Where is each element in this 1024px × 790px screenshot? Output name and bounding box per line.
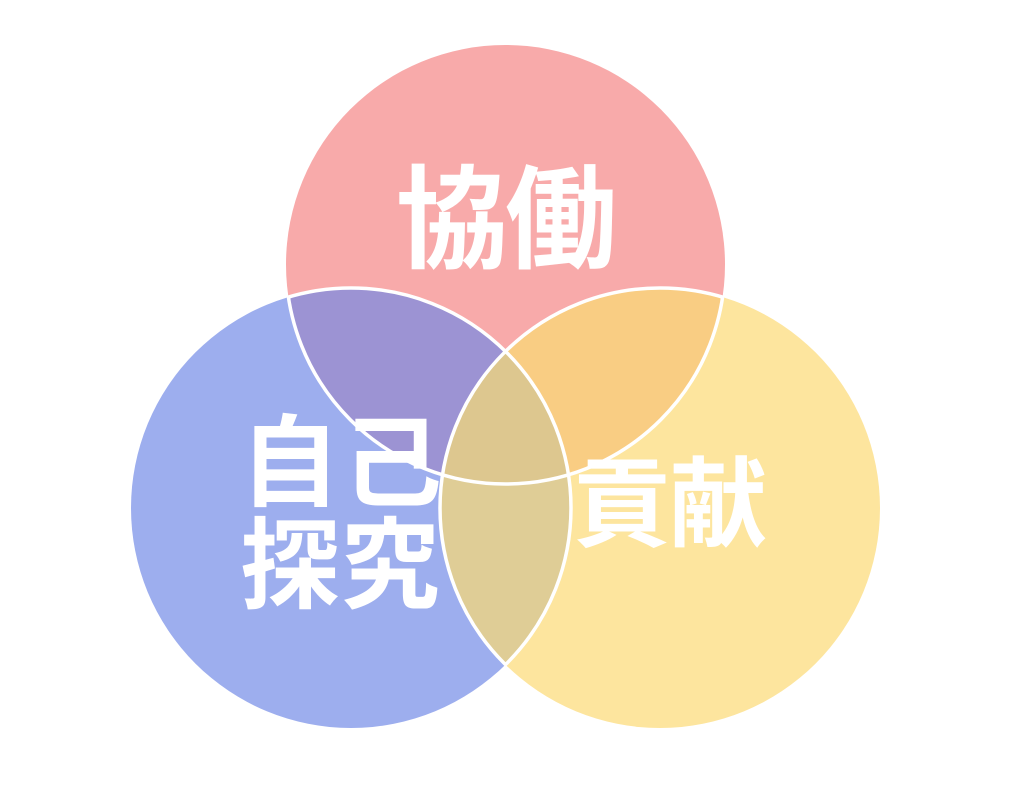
circle: collaboration bbox=[286, 45, 725, 484]
label: contribution: 貢献 bbox=[573, 450, 767, 560]
circle: contribution bbox=[440, 288, 880, 728]
overlap: center of all three bbox=[440, 288, 880, 728]
overlap: collaboration and contribution bbox=[508, 290, 720, 472]
label: self: 自己 bbox=[240, 408, 442, 520]
overlap outlines bbox=[286, 286, 724, 666]
circle: self inquiry bbox=[131, 288, 571, 728]
overlap: self inquiry and contribution bbox=[442, 477, 570, 662]
label: collaboration: 協働 bbox=[396, 158, 617, 283]
label: inquiry: 探究 bbox=[240, 510, 440, 621]
venn diagram bbox=[131, 45, 880, 728]
overlap: collaboration and self inquiry bbox=[290, 290, 503, 472]
